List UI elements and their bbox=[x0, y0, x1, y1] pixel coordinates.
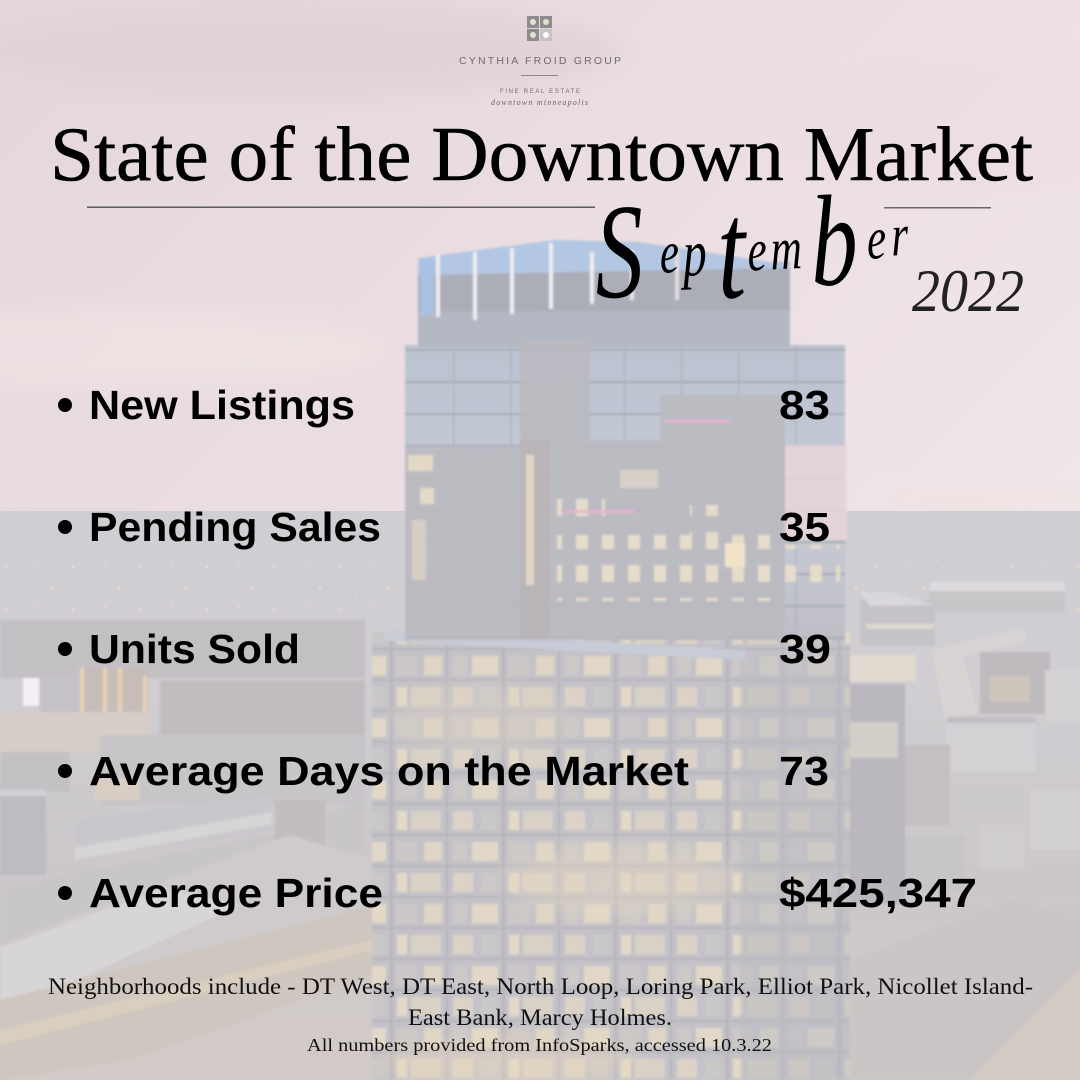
footnote: neighborhoods: Neighborhoods include - DT West, DT East, North Loop, Loring Park, Elliot Park, Nicollet Island- bbox=[48, 974, 1033, 999]
stat: average days on the market: 73 bbox=[779, 748, 829, 794]
stat: pending sales bbox=[58, 504, 830, 550]
title rule left bbox=[87, 206, 595, 208]
right districts bbox=[930, 582, 1065, 591]
title rule right bbox=[884, 207, 991, 208]
logo icon: four squares with dots bbox=[527, 16, 552, 41]
warm light glow bbox=[380, 685, 740, 1080]
stat: units sold: 39 bbox=[779, 626, 831, 672]
year: 2022: 2022 bbox=[912, 258, 1024, 324]
stat: average price: Average Price bbox=[89, 870, 383, 916]
month: September: m bbox=[770, 215, 803, 283]
logo: Cynthia Froid Group: FINE REAL ESTATE bbox=[500, 89, 580, 95]
month: September: t bbox=[715, 173, 750, 329]
tower bbox=[372, 240, 850, 1080]
left districts bbox=[0, 620, 365, 678]
stat: new listings: New Listings bbox=[89, 382, 355, 428]
stat: average price bbox=[58, 870, 977, 916]
stat: new listings: 83 bbox=[779, 382, 830, 428]
footnote: neighborhoods: East Bank, Marcy Holmes. bbox=[408, 1005, 672, 1030]
stat: units sold: Units Sold bbox=[89, 626, 300, 672]
source note: All numbers provided from InfoSparks, accessed 10.3.22 bbox=[307, 1035, 772, 1055]
stat: average days on the market: Average Days on the Market bbox=[89, 748, 689, 794]
title: State of the Downtown Market bbox=[50, 111, 1033, 197]
footnote: neighborhoods bbox=[48, 974, 1033, 1030]
logo: Cynthia Froid Group bbox=[459, 16, 621, 107]
month: September: e bbox=[659, 219, 680, 287]
month: September: S bbox=[593, 176, 645, 328]
reflection silhouette bbox=[405, 340, 785, 640]
stat: pending sales: 35 bbox=[779, 504, 830, 550]
stat: units sold bbox=[58, 626, 831, 672]
logo: Cynthia Froid Group: CYNTHIA FROID GROUP bbox=[459, 55, 621, 67]
stat: pending sales: Pending Sales bbox=[89, 504, 381, 550]
month: September: e bbox=[747, 217, 768, 284]
month: September: b bbox=[809, 167, 859, 314]
month: September: r bbox=[890, 202, 909, 269]
month: September: p bbox=[679, 217, 707, 291]
stat: average price: $425,347 bbox=[779, 870, 977, 916]
stat: new listings bbox=[58, 382, 830, 428]
month: September: e bbox=[866, 205, 887, 273]
logo: Cynthia Froid Group: downtown minneapolis bbox=[491, 98, 588, 107]
